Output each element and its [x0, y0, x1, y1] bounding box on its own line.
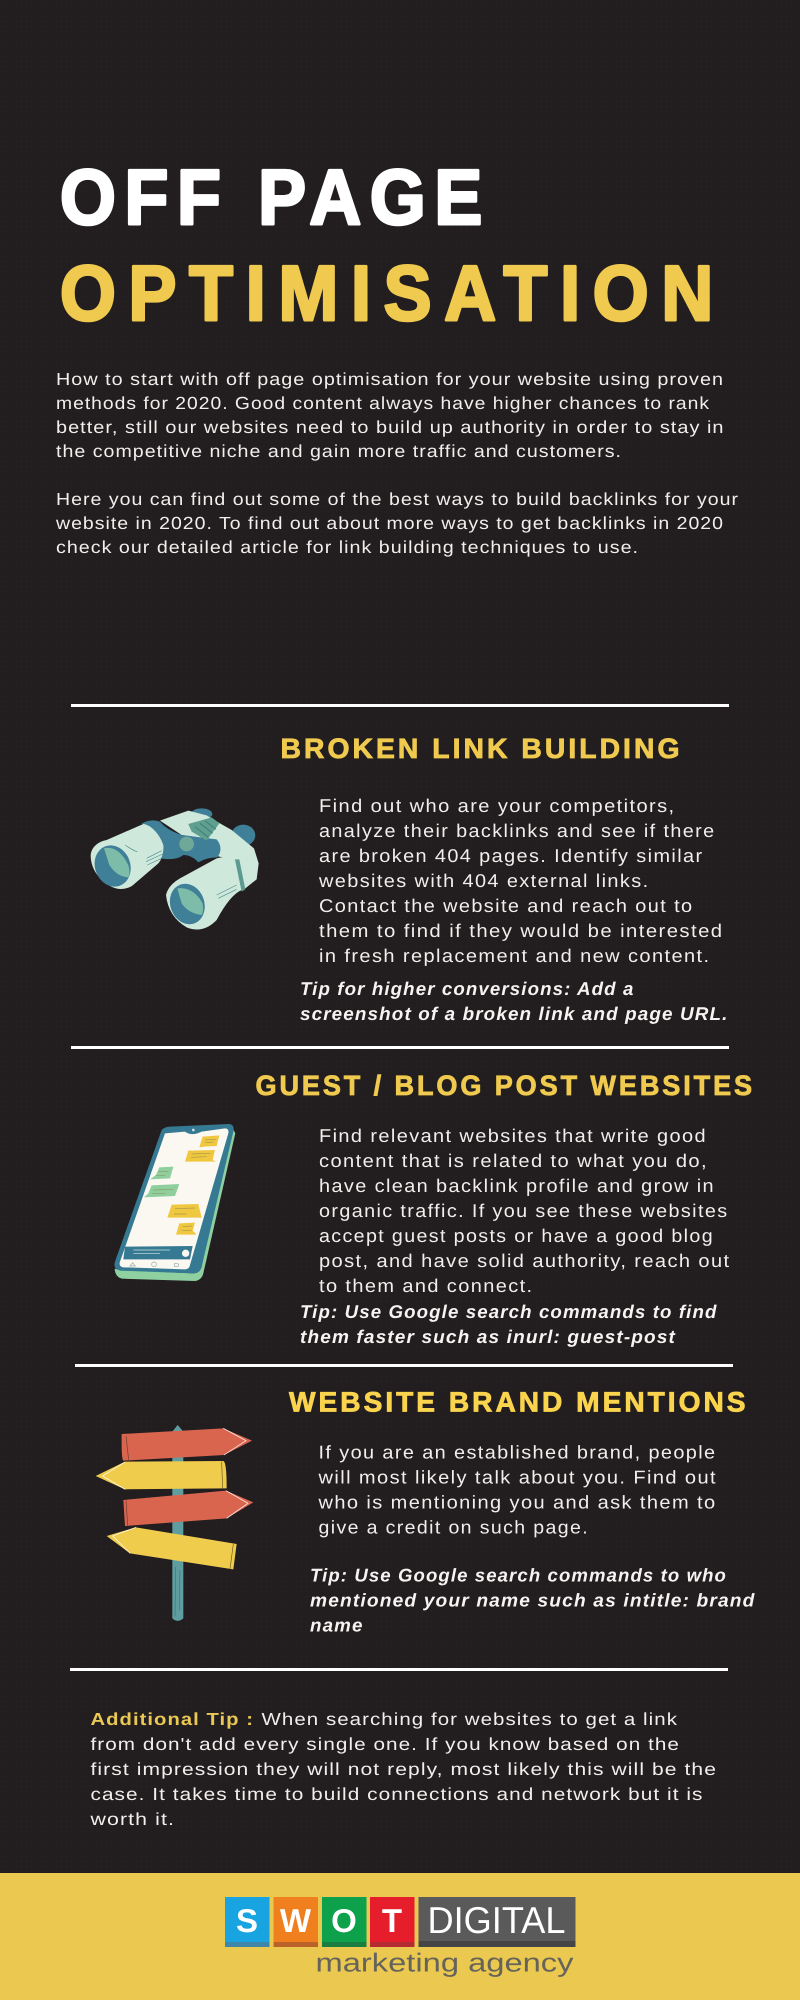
- icon: binoculars: [89, 808, 259, 929]
- intro text block: the competitive niche and gain more traffic and customers.: [56, 441, 622, 461]
- tip text: [310, 1564, 756, 1636]
- body text: content that is related to what you do,: [319, 1150, 708, 1171]
- title: [60, 153, 713, 337]
- panel: broken link building: [89, 733, 728, 1024]
- tip text: mentioned your name such as intitle: brand: [310, 1590, 756, 1610]
- logo tile: S: [225, 1897, 270, 1947]
- additional tip text block: from don't add every single one. If you know based on the: [90, 1734, 680, 1754]
- logo tile: T: T: [382, 1902, 402, 1939]
- body text: have clean backlink profile and grow in: [319, 1175, 715, 1196]
- additional tip text block: case. It takes time to build connections and network but it is: [90, 1784, 704, 1804]
- body text: are broken 404 pages. Identify similar: [319, 845, 704, 866]
- body text: [318, 795, 724, 966]
- body text: to them and connect.: [319, 1275, 534, 1296]
- logo tile: O: O: [331, 1902, 357, 1939]
- body text: organic traffic. If you see these websites: [319, 1200, 728, 1221]
- body text: Find out who are your competitors,: [319, 795, 676, 816]
- additional tip text block: Additional Tip :: [90, 1709, 254, 1729]
- panel: guest / blog post websites: [114, 1070, 755, 1347]
- intro text block: website in 2020. To find out about more ways to get backlinks in 2020: [55, 513, 724, 533]
- tip text: Tip: Use Google search commands to who: [310, 1564, 727, 1586]
- icon: smartphone with chat bubbles: [114, 1124, 235, 1281]
- body text: analyze their backlinks and see if there: [319, 820, 716, 841]
- body text: who is mentioning you and ask them to: [317, 1492, 716, 1512]
- body text: post, and have solid authority, reach out: [319, 1250, 730, 1271]
- intro text block: How to start with off page optimisation for your website using proven: [56, 369, 724, 389]
- logo tile: T: [370, 1897, 414, 1947]
- icon: signpost: [96, 1425, 253, 1621]
- logo tile: O: [322, 1897, 366, 1947]
- body text: will most likely talk about you. Find out: [317, 1466, 717, 1488]
- title line: off page: OFF PAGE: [60, 153, 482, 241]
- body text: give a credit on such page.: [318, 1516, 589, 1538]
- panel: website brand mentions: [96, 1386, 756, 1636]
- tip text: screenshot of a broken link and page URL.: [300, 1003, 728, 1024]
- additional tip text block: first impression they will not reply, most likely this will be the: [90, 1759, 717, 1779]
- body text: websites with 404 external links.: [318, 870, 650, 891]
- logo tagline: marketing agency: [316, 1948, 574, 1978]
- tip text: Tip: Use Google search commands to find: [300, 1301, 718, 1322]
- title line: optimisation: OPTIMISATION: [60, 249, 713, 337]
- body text: them to find if they would be interested: [319, 920, 724, 941]
- logo tile: W: [274, 1897, 318, 1947]
- intro text block: Here you can find out some of the best ways to build backlinks for your: [56, 489, 739, 509]
- body text: accept guest posts or have a good blog: [319, 1225, 714, 1246]
- tip text: [300, 1301, 718, 1347]
- logo tile: W: W: [280, 1902, 312, 1939]
- tip text: Tip for higher conversions: Add a: [300, 978, 634, 999]
- additional tip text block: worth it.: [89, 1809, 175, 1829]
- body text: Find relevant websites that write good: [319, 1125, 707, 1146]
- body text: If you are an established brand, people: [318, 1442, 716, 1462]
- tip text: name: [310, 1614, 364, 1636]
- body text: [317, 1442, 717, 1538]
- intro text block: better, still our websites need to build up authority in order to stay in: [56, 417, 724, 437]
- logo: swot digital marketing agency: [225, 1897, 576, 1978]
- logo tile: S: S: [236, 1902, 258, 1939]
- heading: guest / blog post websites: GUEST / BLOG POST WEBSITES: [256, 1070, 755, 1101]
- additional tip text block: [89, 1709, 717, 1829]
- body text: [319, 1125, 730, 1296]
- footer band: [0, 1873, 800, 2000]
- body text: Contact the website and reach out to: [319, 895, 694, 916]
- heading: broken link building: BROKEN LINK BUILDING: [280, 733, 682, 764]
- intro text block: [55, 369, 739, 557]
- intro text block: check our detailed article for link building techniques to use.: [56, 537, 639, 557]
- heading: website brand mentions: WEBSITE BRAND MENTIONS: [289, 1386, 748, 1418]
- tip text: them faster such as inurl: guest-post: [300, 1326, 676, 1347]
- body text: in fresh replacement and new content.: [319, 945, 710, 966]
- intro text block: methods for 2020. Good content always have higher chances to rank: [56, 393, 710, 413]
- logo tile: digital: DIGITAL: [428, 1899, 566, 1941]
- tip text: [300, 978, 728, 1024]
- additional tip text block: When searching for websites to get a link: [262, 1709, 678, 1729]
